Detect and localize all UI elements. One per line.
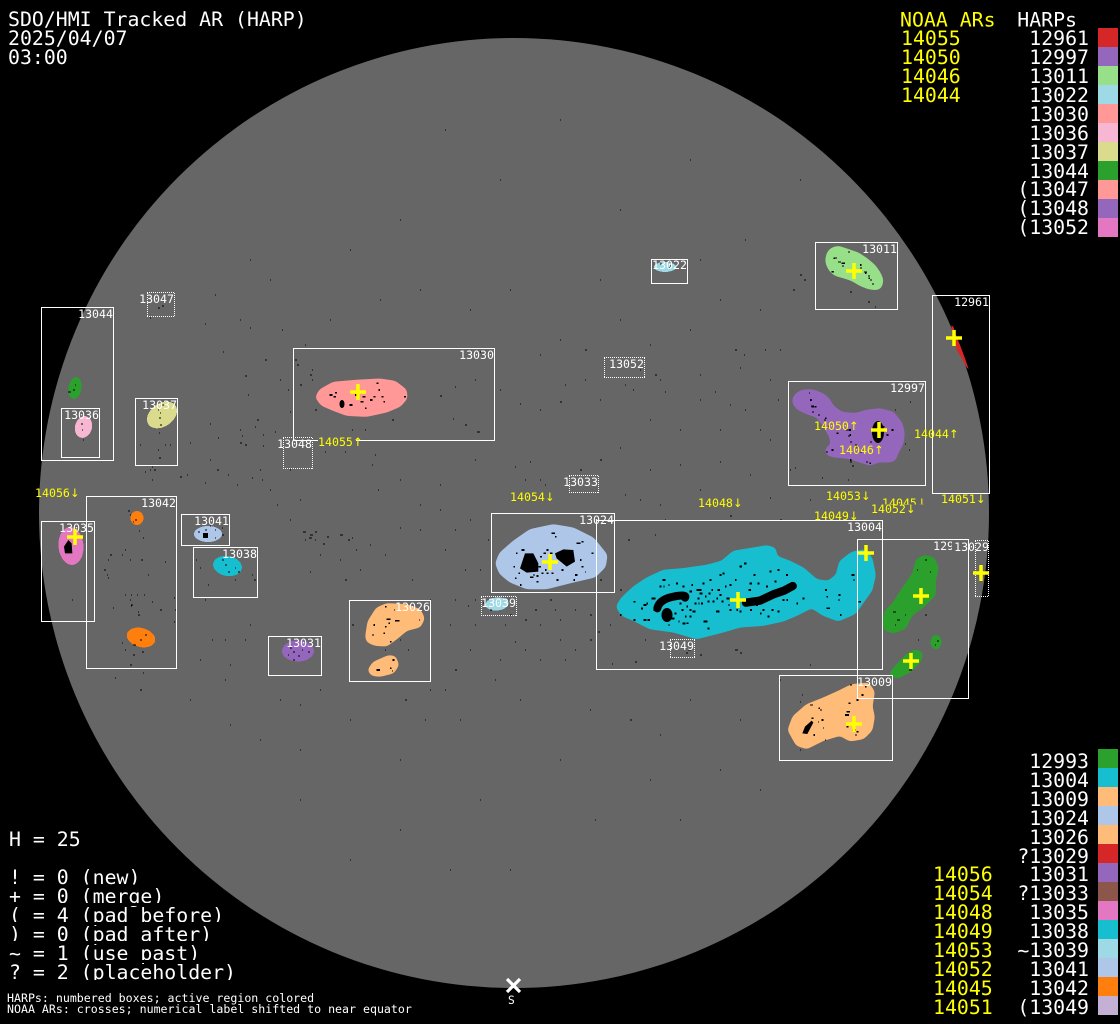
HARPs list top: 13030 — [1029, 103, 1089, 126]
region 13038 — [211, 554, 244, 578]
box 13030 — [294, 348, 494, 440]
HARP box labels: 13035 — [59, 521, 94, 535]
HARP box labels: 13036 — [64, 408, 99, 422]
NOAA ARs list top: NOAA ARs — [900, 8, 996, 32]
HARPs list bottom: 13026 — [1029, 826, 1089, 849]
status counts: H = 25 — [9, 828, 81, 851]
HARP box labels: 13037 — [142, 398, 177, 412]
sunspot follower in 13004 — [662, 608, 672, 622]
HARPs list top: (13047 — [1017, 178, 1089, 201]
NOAA AR crosses — [67, 263, 989, 732]
top colour swatches — [1098, 28, 1118, 237]
dense specks in 13004 east — [620, 575, 861, 623]
box 13026 — [350, 600, 430, 682]
HARPs list top: 13022 — [1029, 84, 1089, 107]
HARP box labels: 13031 — [286, 636, 321, 650]
footer notes — [7, 991, 412, 1016]
NOAA ARs list bottom — [933, 863, 993, 1019]
region 13031 — [282, 640, 314, 662]
status counts: ( = 4 (pad before) — [9, 904, 224, 927]
status counts: ? = 2 (placeholder) — [9, 961, 236, 984]
box 13036 — [62, 408, 100, 458]
sunspot arc in 13004 — [657, 596, 685, 608]
HARPs list bottom: 13038 — [1029, 920, 1089, 943]
NOAA AR labels with arrows: 14045↓ — [882, 496, 927, 510]
NOAA AR labels with arrows: 14049↓ — [814, 509, 859, 523]
NOAA ARs list bottom: 14048 — [933, 901, 993, 924]
box 13038 — [194, 548, 258, 598]
box 13047 — [147, 292, 175, 317]
HARPs list bottom: 13009 — [1029, 788, 1089, 811]
NOAA ARs list bottom: 14049 — [933, 920, 993, 943]
HARP box labels: 13048 — [277, 437, 312, 451]
HARP box labels: 13022 — [652, 258, 687, 272]
footer notes: HARPs: numbered boxes; active region colored — [7, 991, 314, 1005]
sunspot in 13030 — [340, 400, 344, 408]
region 13037 — [142, 396, 182, 434]
HARP box labels: 12993 — [933, 539, 968, 553]
box 13029 — [975, 540, 989, 597]
HARPs list top: 12961 — [1029, 27, 1089, 50]
NOAA AR labels with arrows: 14055↑ — [318, 435, 363, 449]
HARPs list top: 13044 — [1029, 160, 1089, 183]
footer notes: NOAA ARs: crosses; numerical label shifted to near equator — [7, 1002, 412, 1016]
sunspot in 13035 — [64, 540, 72, 553]
NOAA ARs list top: 14044 — [901, 84, 961, 107]
title: 03:00 — [8, 46, 68, 69]
HARP box labels: 12961 — [954, 295, 989, 309]
region 13022 — [654, 262, 676, 272]
region 13026 south — [368, 656, 398, 676]
HARP box labels: 13029 — [954, 540, 989, 554]
NOAA AR labels with arrows: 14048↓ — [698, 496, 743, 510]
HARPs list bottom: 13042 — [1029, 977, 1089, 1000]
box 13044 — [42, 308, 114, 460]
large sunspots — [64, 400, 884, 734]
NOAA ARs list bottom: 14052 — [933, 958, 993, 981]
region 12961 sliver — [951, 325, 969, 369]
region 12997 — [793, 390, 904, 465]
bottom colour swatches — [1098, 749, 1118, 1015]
scattered small sunspot specks — [68, 120, 939, 870]
box 12993 — [858, 540, 968, 698]
HARP boxes — [42, 242, 990, 760]
region 13042 south — [125, 625, 157, 650]
NOAA AR labels with arrows: 14051↓ — [941, 492, 986, 506]
NOAA AR labels with arrows: 14053↓ — [826, 489, 871, 503]
region 13041 — [194, 526, 222, 542]
title — [8, 8, 307, 69]
title: SDO/HMI Tracked AR (HARP) — [8, 8, 307, 31]
gap behind label 14055 — [318, 436, 356, 447]
NOAA ARs list top: 14050 — [901, 46, 961, 69]
NOAA AR labels with arrows: 14050↑ — [814, 419, 859, 433]
HARPs list top — [1017, 8, 1089, 239]
dense specks in 13004 — [641, 563, 805, 628]
box 13042 — [86, 496, 176, 668]
box 13004 — [596, 520, 882, 670]
HARPs list bottom: ?13033 — [1017, 882, 1089, 905]
HARPs list bottom: 12993 — [1029, 750, 1089, 773]
HARPs list top: (13052 — [1017, 216, 1089, 239]
region 13039 — [485, 597, 509, 611]
small elliptical regions — [57, 262, 942, 662]
status counts — [9, 828, 236, 984]
NOAA AR labels with arrows: 14054↓ — [510, 490, 555, 504]
dense specks in 13024 — [513, 533, 593, 585]
box 13052 — [604, 358, 645, 378]
HARPs list top: 13011 — [1029, 65, 1089, 88]
region 13044 — [67, 376, 83, 400]
HARP box labels — [59, 242, 989, 689]
HARP box labels: 13024 — [579, 513, 614, 527]
box 13039 — [481, 596, 517, 616]
box 13022 — [652, 260, 688, 284]
NOAA ARs list bottom: 14045 — [933, 977, 993, 1000]
HARPs list bottom: 13041 — [1029, 958, 1089, 981]
region 13004 — [617, 546, 875, 638]
NOAA AR labels with arrows: 14044↑ — [914, 427, 959, 441]
sunspot in 13024 west — [520, 553, 538, 573]
HARP box labels: 13041 — [194, 514, 229, 528]
region 12993 small — [930, 635, 942, 649]
south pole marker — [507, 979, 520, 1007]
region 13026 north — [366, 604, 424, 646]
HARPs list bottom: 13024 — [1029, 807, 1089, 830]
title: 2025/04/07 — [8, 27, 127, 50]
sunspot in 13041 — [203, 533, 208, 538]
HARP box labels: 13052 — [609, 357, 644, 371]
HARPs list top: 12997 — [1029, 46, 1089, 69]
HARP box labels: 13049 — [659, 639, 694, 653]
region 13024 — [496, 525, 607, 588]
HARP box labels: 13009 — [857, 675, 892, 689]
sunspot in 12997 — [872, 421, 884, 443]
NOAA AR labels with arrows: 14056↓ — [35, 486, 80, 500]
HARPs list top: HARPs — [1017, 8, 1077, 32]
status counts: ! = 0 (new) — [9, 866, 140, 889]
HARPs list top: (13048 — [1017, 197, 1089, 220]
box 13031 — [268, 636, 322, 676]
NOAA ARs list bottom: 14053 — [933, 939, 993, 962]
sunspot in 13024 east — [555, 549, 575, 567]
HARP box labels: 13033 — [563, 475, 598, 489]
region 13009 — [788, 683, 874, 748]
sunspot ribbon in 13004 — [746, 586, 793, 603]
sunspot in 13009 — [802, 721, 813, 734]
NOAA ARs list bottom: 14056 — [933, 863, 993, 886]
NOAA ARs list bottom: 14051 — [933, 996, 993, 1019]
region 13035 — [57, 526, 85, 566]
region 12993 main — [883, 556, 938, 633]
active region blobs — [316, 247, 938, 748]
HARP box labels: 13047 — [139, 292, 174, 306]
icon: south X — [507, 979, 520, 992]
HARPs list top: 13036 — [1029, 122, 1089, 145]
box 13035 — [42, 522, 94, 622]
NOAA AR labels with arrows: 14046↑ — [839, 443, 884, 457]
NOAA ARs list top: 14046 — [901, 65, 961, 88]
status counts: + = 0 (merge) — [9, 885, 164, 908]
HARPs list bottom: 13035 — [1029, 901, 1089, 924]
status counts: ~ = 1 (use past) — [9, 942, 200, 965]
dense specks in 12997 and 13011 — [810, 258, 893, 463]
HARPs list bottom: ?13029 — [1017, 845, 1089, 868]
box 13024 — [492, 514, 614, 592]
HARPs list top: 13037 — [1029, 141, 1089, 164]
HARP box labels: 13042 — [141, 496, 176, 510]
HARP box labels: 12997 — [890, 381, 925, 395]
region 12993 middle — [890, 650, 923, 677]
dense specks in 13030 and 13026 — [329, 383, 406, 670]
NOAA ARs list top — [900, 8, 996, 107]
HARP box labels: 13011 — [862, 242, 897, 256]
box 13033 — [569, 476, 599, 493]
status counts: ) = 0 (pad after) — [9, 923, 212, 946]
region 13042 north — [130, 511, 144, 525]
HARP box labels: 13044 — [78, 307, 113, 321]
HARPs list bottom: ~13039 — [1017, 939, 1089, 962]
region 13030 — [316, 379, 407, 416]
HARP box labels: 13038 — [222, 547, 257, 561]
S label: S — [508, 994, 515, 1007]
box 12997 — [788, 382, 926, 486]
HARP box labels: 13030 — [459, 348, 494, 362]
region 13036 — [72, 414, 95, 440]
box 12961 — [932, 296, 990, 494]
region 13011 — [826, 247, 883, 289]
NOAA AR labels with arrows: 14052↓ — [871, 502, 916, 516]
HARPs list bottom: 13031 — [1029, 863, 1089, 886]
HARP box labels: 13026 — [395, 600, 430, 614]
NOAA AR labels with arrows — [35, 419, 986, 523]
HARPs list bottom — [1017, 750, 1089, 1019]
box 13041 — [182, 514, 230, 546]
box 13009 — [780, 676, 892, 760]
HARPs list bottom: 13004 — [1029, 769, 1089, 792]
HARP box labels: 13004 — [847, 520, 882, 534]
NOAA ARs list top: 14055 — [901, 27, 961, 50]
dense specks in 13009 — [812, 687, 867, 735]
box 13049 — [670, 640, 695, 658]
solar disk — [39, 38, 989, 988]
NOAA ARs list bottom: 14054 — [933, 882, 993, 905]
HARP box labels: 13039 — [481, 596, 516, 610]
box 13048 — [283, 438, 313, 469]
box 13037 — [136, 398, 178, 466]
box 13011 — [816, 242, 898, 310]
HARPs list bottom: (13049 — [1017, 996, 1089, 1019]
